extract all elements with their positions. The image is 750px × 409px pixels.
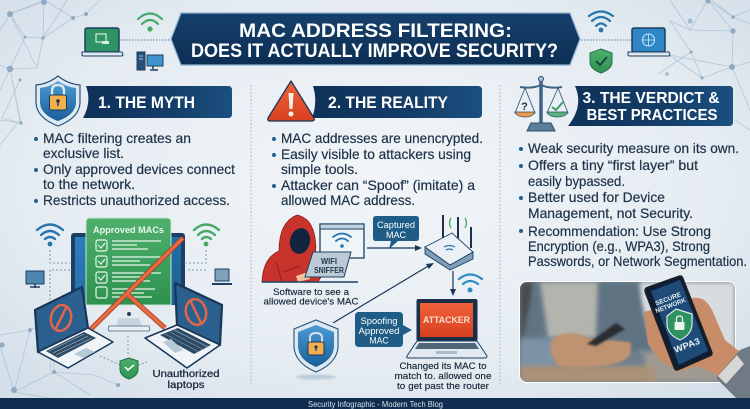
text: myth bullets: Restricts unauthorized access. <box>43 192 230 208</box>
icon: blue shield with padlock <box>36 76 80 126</box>
callout: captured MAC: Captured <box>377 220 415 231</box>
right blocked laptop <box>145 283 222 368</box>
phone <box>645 276 712 370</box>
callout: captured MAC <box>373 216 419 249</box>
photo: person holding phone with WPA3: SECURE <box>654 291 683 308</box>
label: unauthorized laptops: Unauthorized <box>152 369 220 380</box>
text: reality bullets <box>272 130 483 208</box>
sniffer laptop: SNIFFER <box>314 266 344 275</box>
heading: verdict: 3. THE VERDICT & <box>582 90 720 107</box>
sniffer window <box>320 224 364 258</box>
icon: shield with padlock <box>294 320 338 380</box>
heading: verdict: BEST PRACTICES <box>586 107 718 124</box>
icon: scales <box>515 76 568 131</box>
caption: changed its MAC: to get past the router <box>397 381 489 392</box>
heading: the reality: 2. THE REALITY <box>328 94 448 112</box>
panel: the verdict <box>515 76 750 398</box>
photo: person holding phone with WPA3 <box>519 276 750 398</box>
panel: the reality <box>262 81 492 392</box>
illustration: hacker with wifi sniffer <box>262 215 364 308</box>
arrow: router to attacker <box>450 271 456 296</box>
icon: side devices and wifi <box>26 224 232 300</box>
text: verdict bullets: Encryption (e.g., WPA3), Strong <box>528 238 710 254</box>
icon: warning triangle <box>268 81 314 121</box>
icon: scales: ? <box>521 101 528 113</box>
title banner: MAC ADDRESS FILTERING: <box>239 21 512 42</box>
illustration: approved MACs and blocked laptops <box>26 218 232 391</box>
icon: router <box>425 215 473 270</box>
text: verdict bullets: easily bypassed. <box>528 173 625 189</box>
text: reality bullets: Attacker can “Spoof” (imitate) a <box>281 177 475 193</box>
text: myth bullets: Only approved devices connect <box>43 161 235 177</box>
text: reality bullets: Easily visible to attackers using <box>281 146 471 162</box>
divider left <box>251 85 500 385</box>
caption: changed its MAC <box>394 361 492 392</box>
text: verdict bullets: Weak security measure on its own. <box>528 140 739 156</box>
text: myth bullets <box>34 130 235 208</box>
text: verdict bullets: Better used for Device <box>528 189 665 205</box>
icon: laptop, wifi and desktop, top left <box>82 14 171 70</box>
callout: spoofing approved MAC: Spoofing <box>360 316 398 327</box>
heading: the myth <box>83 86 232 118</box>
text: verdict bullets <box>519 140 747 269</box>
heading: the myth: 1. THE MYTH <box>98 94 195 112</box>
monitor <box>71 233 185 331</box>
title banner: DOES IT ACTUALLY IMPROVE SECURITY? <box>191 41 558 62</box>
approved MACs card <box>86 218 171 305</box>
arrow: capture to router <box>367 245 422 251</box>
arrow: shield to router <box>333 263 434 323</box>
orange cross <box>90 238 183 330</box>
photo: person holding phone with WPA3: WPA3 <box>673 336 701 355</box>
caption: software: Software to see a <box>273 287 350 298</box>
icon: attacker laptop: ATTACKER <box>423 315 470 326</box>
icon: wifi near attacker <box>459 274 482 292</box>
text: myth bullets: MAC filtering creates an <box>43 130 191 146</box>
approved MACs card: Approved MACs <box>93 225 164 236</box>
caption: changed its MAC: match to. allowed one <box>394 371 492 382</box>
text: verdict bullets: Offers a tiny “first layer” but <box>528 157 698 173</box>
callout: spoofing approved MAC: MAC <box>370 336 389 346</box>
sniffer laptop: WIFI <box>321 257 337 266</box>
hacker <box>262 215 324 282</box>
panel: the myth <box>26 76 235 391</box>
title banner <box>171 13 580 65</box>
photo: person holding phone with WPA3: NETWORK <box>655 297 687 315</box>
text: reality bullets: simple tools. <box>281 161 358 177</box>
sniffer laptop <box>262 252 358 282</box>
caption: changed its MAC: Changed its MAC to <box>400 361 486 372</box>
text: verdict bullets: Recommendation: Use Strong <box>528 223 711 239</box>
callout: spoofing approved MAC <box>355 312 412 347</box>
text: reality bullets: MAC addresses are unencrypted. <box>281 130 483 146</box>
icon: attacker laptop <box>407 299 487 358</box>
text: reality bullets: allowed MAC address. <box>281 192 415 208</box>
heading: the reality <box>312 86 482 118</box>
label: unauthorized laptops: laptops <box>168 380 204 391</box>
shield in phone <box>667 309 692 340</box>
illustration: hacker with wifi sniffer: allowed device's MAC <box>264 296 359 308</box>
heading: verdict <box>568 86 733 126</box>
icon: wifi, laptop and shield, top right <box>581 12 670 73</box>
text: myth bullets: to the network. <box>43 176 135 192</box>
text: verdict bullets: Management, not Security. <box>528 205 693 221</box>
footer bar: Security Infographic - Modern Tech Blog <box>308 399 443 409</box>
footer bar <box>0 398 750 409</box>
callout: spoofing approved MAC: Approved <box>358 326 400 337</box>
label: unauthorized laptops <box>152 369 220 391</box>
icon: small green shield <box>100 336 147 379</box>
text: myth bullets: exclusive list. <box>43 145 124 161</box>
left blocked laptop <box>35 287 113 368</box>
callout: captured MAC: MAC <box>386 230 406 241</box>
phone hand <box>644 298 740 376</box>
